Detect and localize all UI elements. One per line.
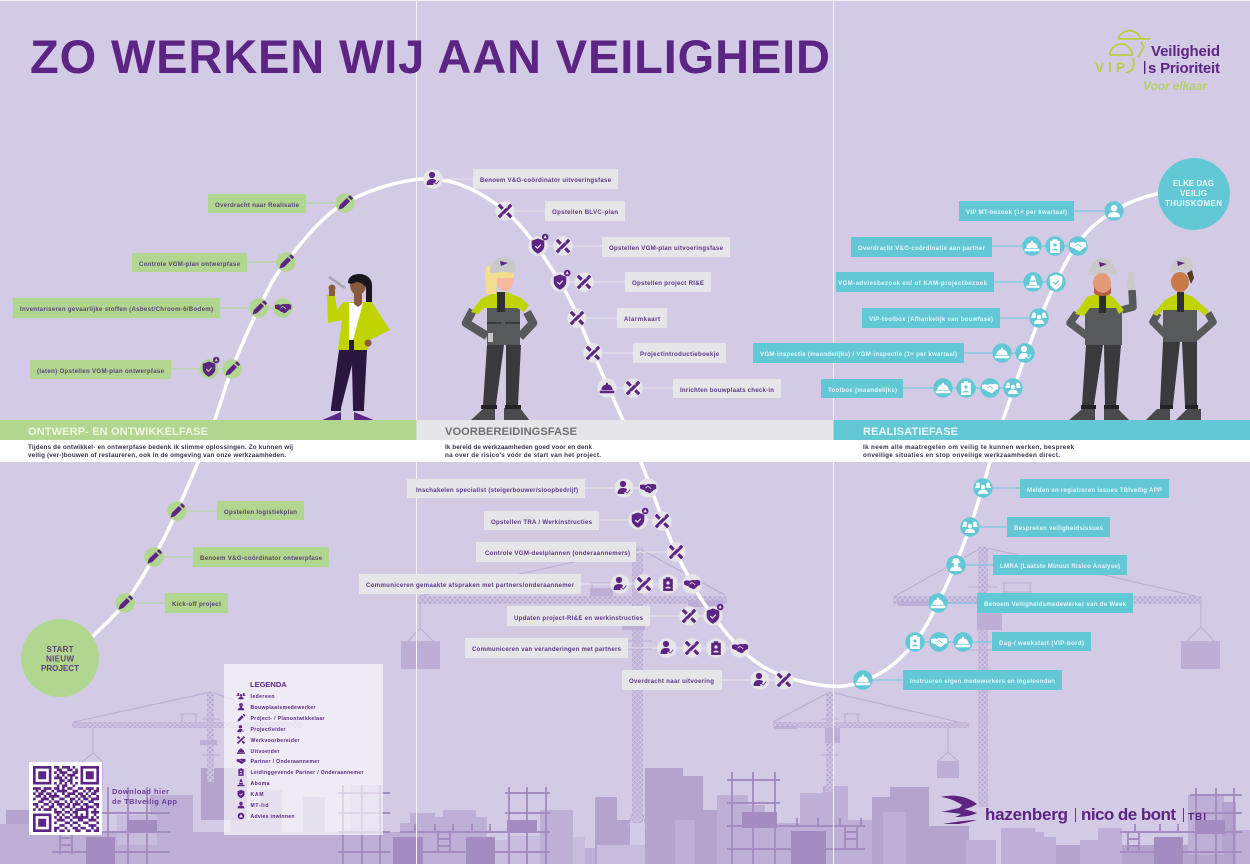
legend panel: KAM (250, 792, 264, 798)
phase band: ontwerp- en ontwikkelfase (0, 420, 416, 440)
step: VIP-toolbox: VIP-toolbox (Afhankelijk van bouwfase) (869, 316, 993, 323)
step: Inrichten bouwplaats check-in (597, 378, 781, 398)
logo: hazenberg nico de bont TBI: hazenberg (985, 805, 1068, 824)
step: Communiceren van veranderingen met partners: Communiceren van veranderingen met partners (472, 646, 622, 653)
step: Opstellen VGM-plan uitvoeringsfase (528, 234, 730, 257)
step: Inrichten bouwplaats check-in: Inrichten bouwplaats check-in (680, 387, 774, 394)
step: Opstellen TRA / Werkinstructies (484, 508, 672, 531)
step: VGM-adviesbezoek en/ of KAM-projectbezoek (836, 272, 1066, 292)
step: Communiceren gemaakte afspraken: Communiceren gemaakte afspraken met partners/onderaannemer (366, 582, 575, 589)
legend panel: Leidinggevende Partner / Onderaannemer (250, 770, 364, 776)
logo: hazenberg nico de bont TBI (941, 796, 1206, 824)
step: Controle VGM-plan ontwerpfase: Controle VGM-plan ontwerpfase (139, 261, 241, 268)
scaffolding (52, 772, 1242, 864)
legend panel: Uitvoerder (250, 749, 280, 755)
crane: small right (773, 692, 969, 792)
step: Inschakelen specialist (407, 478, 658, 498)
start circle: START (46, 645, 74, 654)
phase band: voorbereidingsfase (416, 420, 834, 440)
step: VIP MT-bezoek (959, 201, 1124, 221)
step: Kick-off project: Kick-off project (172, 601, 221, 608)
step: Controle VGM-deelplannen (476, 542, 686, 562)
phase descriptions: Tijdens de ontwikkel- en ontwerpfase bedenk ik slimme oplossingen. Zo kunnen wij (28, 444, 293, 451)
logo: VIP Veiligheid Is Prioriteit: s Prioriteit (1148, 60, 1220, 77)
step: Controle VGM-plan ontwerpfase (132, 252, 296, 272)
legend panel: Projectleider (250, 727, 286, 733)
title: ZO WERKEN WIJ AAN VEILIGHEID (30, 30, 830, 83)
legend panel (224, 664, 383, 835)
step: Instrueren eigen medewerkers en ingeleenden: Instrueren eigen medewerkers en ingeleenden (910, 678, 1055, 685)
step: Benoem V&G-coördinator uitvoeringsfase (423, 169, 618, 189)
step: Opstellen project RI&E: Opstellen project RI&E (632, 280, 704, 287)
safety route curve (92, 179, 1160, 686)
logo: hazenberg nico de bont TBI: TBI (1188, 812, 1206, 823)
step: Instrueren eigen medewerkers en ingeleenden (853, 670, 1062, 690)
step: Bespreken veiligheidsissues: Bespreken veiligheidsissues (1014, 525, 1104, 532)
step: LMRA: LMRA (Laatste Minuut Risico Analyse) (1000, 563, 1120, 570)
logo: VIP Veiligheid Is Prioriteit (1095, 31, 1220, 93)
step: Communiceren gemaakte afspraken (359, 574, 702, 594)
QR code (29, 762, 102, 835)
step: VGM-adviesbezoek en/ of KAM-projectbezoek: VGM-adviesbezoek en/ of KAM-projectbezoek (838, 280, 988, 287)
step: Melden en registreren issues (973, 478, 1169, 498)
crane: centre (401, 548, 727, 830)
step: VIP-toolbox (862, 308, 1049, 328)
step: Overdracht naar uitvoering: Overdracht naar uitvoering (629, 678, 714, 685)
step: Overdracht naar Realisatie (208, 193, 355, 213)
logo: hazenberg nico de bont TBI: nico de bont (1081, 805, 1176, 824)
start circle (21, 619, 99, 697)
step: Dag-/ weekstart: Dag-/ weekstart (VIP-bord) (999, 640, 1084, 647)
step: VIP MT-bezoek: VIP MT-bezoek (1× per kwartaal) (966, 209, 1067, 216)
legend panel: Project- / Planontwikkelaar (250, 716, 325, 722)
phase band: realisatiefase (834, 420, 1250, 440)
step: Benoem Veiligheidsmedewerker van de Week (928, 593, 1133, 613)
step: Kick-off project (115, 593, 228, 613)
download text: Download hier (112, 787, 169, 796)
legend panel: LEGENDA (250, 680, 287, 689)
phase descriptions: Ik bereid de werkzaamheden goed voor en denk (445, 444, 592, 451)
character: blonde site worker (466, 257, 533, 421)
logo: VIP Veiligheid Is Prioriteit: VIP (1095, 60, 1125, 75)
skyline: city buildings (0, 768, 1250, 864)
end circle: VEILIG (1180, 189, 1207, 198)
start circle: NIEUW (46, 654, 74, 664)
phase descriptions: onveilige situaties en stop onveilige werkzaamheden direct. (863, 452, 1060, 459)
step: Toolbox (maandelijks) (821, 378, 1023, 398)
step: Benoem V&G-coördinator ontwerpfase (144, 547, 329, 567)
legend panel: Advies inwinnen (250, 814, 294, 820)
step: Inventariseren gevaarlijke stoffen (13, 298, 293, 318)
step: Opstellen project RI&E (550, 270, 711, 292)
phase band: ontwerp- en ontwikkelfase: ONTWERP- EN ONTWIKKELFASE (28, 426, 208, 438)
end circle: THUISKOMEN (1165, 199, 1222, 208)
step: (laten) Opstellen VGM-plan ontwerpfase: (laten) Opstellen VGM-plan ontwerpfase (37, 368, 165, 375)
phase descriptions: Ik neem alle maatregelen om veilig te kunnen werken, bespreek (863, 444, 1074, 451)
step: Updaten project-RI&E en werkinstructies: Updaten project-RI&E en werkinstructies (514, 615, 644, 622)
character: designer woman (320, 274, 390, 421)
crane: right (893, 547, 1220, 807)
phase descriptions: na over de risico's vóór de start van het project. (445, 452, 601, 459)
step: Melden en registreren issues: Melden en registreren issues TBIveilig APP (1027, 487, 1162, 494)
step: Overdracht V&G-coördinatie aan partner (851, 236, 1088, 257)
step: Controle VGM-deelplannen: Controle VGM-deelplannen (onderaannemers) (485, 550, 630, 557)
step: Opstellen logistiekplan (167, 501, 304, 521)
legend panel: Partner / Onderaannemer (250, 759, 320, 765)
download text (112, 787, 177, 806)
crane: small left (72, 692, 302, 790)
download text: de TBIveilig App (112, 797, 177, 806)
step: Bespreken veiligheidsissues (960, 517, 1110, 537)
step: Inschakelen specialist: Inschakelen specialist (steigerbouwer/sloopbedrijf) (416, 487, 578, 494)
step: Projectintroductieboekje: Projectintroductieboekje (640, 351, 720, 358)
step: Benoem Veiligheidsmedewerker van de Week: Benoem Veiligheidsmedewerker van de Week (984, 601, 1127, 608)
step: Opstellen logistiekplan: Opstellen logistiekplan (224, 509, 297, 516)
step: Opstellen VGM-plan uitvoeringsfase: Opstellen VGM-plan uitvoeringsfase (609, 245, 724, 252)
step: Toolbox (maandelijks): Toolbox (maandelijks) (828, 387, 897, 394)
legend panel: Bouwplaatsmedewerker (250, 705, 316, 711)
step: Updaten project-RI&E en werkinstructies (507, 604, 724, 626)
step: Overdracht naar uitvoering (622, 670, 794, 690)
step: Dag-/ weekstart (905, 632, 1091, 652)
step: Alarmkaart: Alarmkaart (624, 316, 660, 323)
step: LMRA (946, 555, 1127, 575)
step: Opstellen TRA / Werkinstructies: Opstellen TRA / Werkinstructies (491, 519, 593, 526)
step: Overdracht naar Realisatie: Overdracht naar Realisatie (215, 202, 300, 209)
logo: VIP Veiligheid Is Prioriteit: Voor elkaar (1143, 79, 1208, 93)
step: Benoem V&G-coördinator ontwerpfase: Benoem V&G-coördinator ontwerpfase (200, 555, 323, 562)
end circle (1158, 158, 1230, 230)
step: Communiceren van veranderingen met partners (465, 638, 750, 658)
legend panel: MT-lid (250, 803, 268, 809)
step: Projectintroductieboekje (583, 343, 726, 363)
start circle: PROJECT (41, 664, 79, 673)
step: (laten) Opstellen VGM-plan ontwerpfase (30, 357, 242, 379)
phase descriptions: veilig (ver-)bouwen of restaureren, ook in de omgeving van onze werkzaamheden. (28, 452, 286, 459)
phase band: realisatiefase: REALISATIEFASE (863, 426, 958, 438)
legend panel: Aboma (250, 781, 270, 787)
phase band: voorbereidingsfase: VOORBEREIDINGSFASE (445, 426, 577, 438)
logo: VIP Veiligheid Is Prioriteit: Veiligheid (1151, 43, 1220, 60)
step: VGM-inspectie: VGM-inspectie (maandelijks) / VGM-inspectie (1× per kwartaal) (760, 351, 957, 358)
step: Overdracht V&G-coördinatie aan partner: Overdracht V&G-coördinatie aan partner (858, 245, 986, 252)
legend panel: Iedereen (250, 694, 274, 700)
phase descriptions (0, 440, 1250, 462)
step: Opstellen BLVC-plan: Opstellen BLVC-plan (552, 209, 618, 216)
step: Benoem V&G-coördinator uitvoeringsfase: Benoem V&G-coördinator uitvoeringsfase (480, 177, 612, 184)
step: Opstellen BLVC-plan (495, 201, 625, 221)
end circle: ELKE DAG (1173, 179, 1214, 188)
legend panel: Werkvoorbereider (250, 738, 300, 744)
step: VGM-inspectie (753, 343, 1035, 363)
character: two site workers (1068, 257, 1213, 421)
step: Alarmkaart (567, 308, 667, 328)
step: Inventariseren gevaarlijke stoffen: Inventariseren gevaarlijke stoffen (Asbest/Chroom-6/Bodem) (20, 306, 213, 313)
